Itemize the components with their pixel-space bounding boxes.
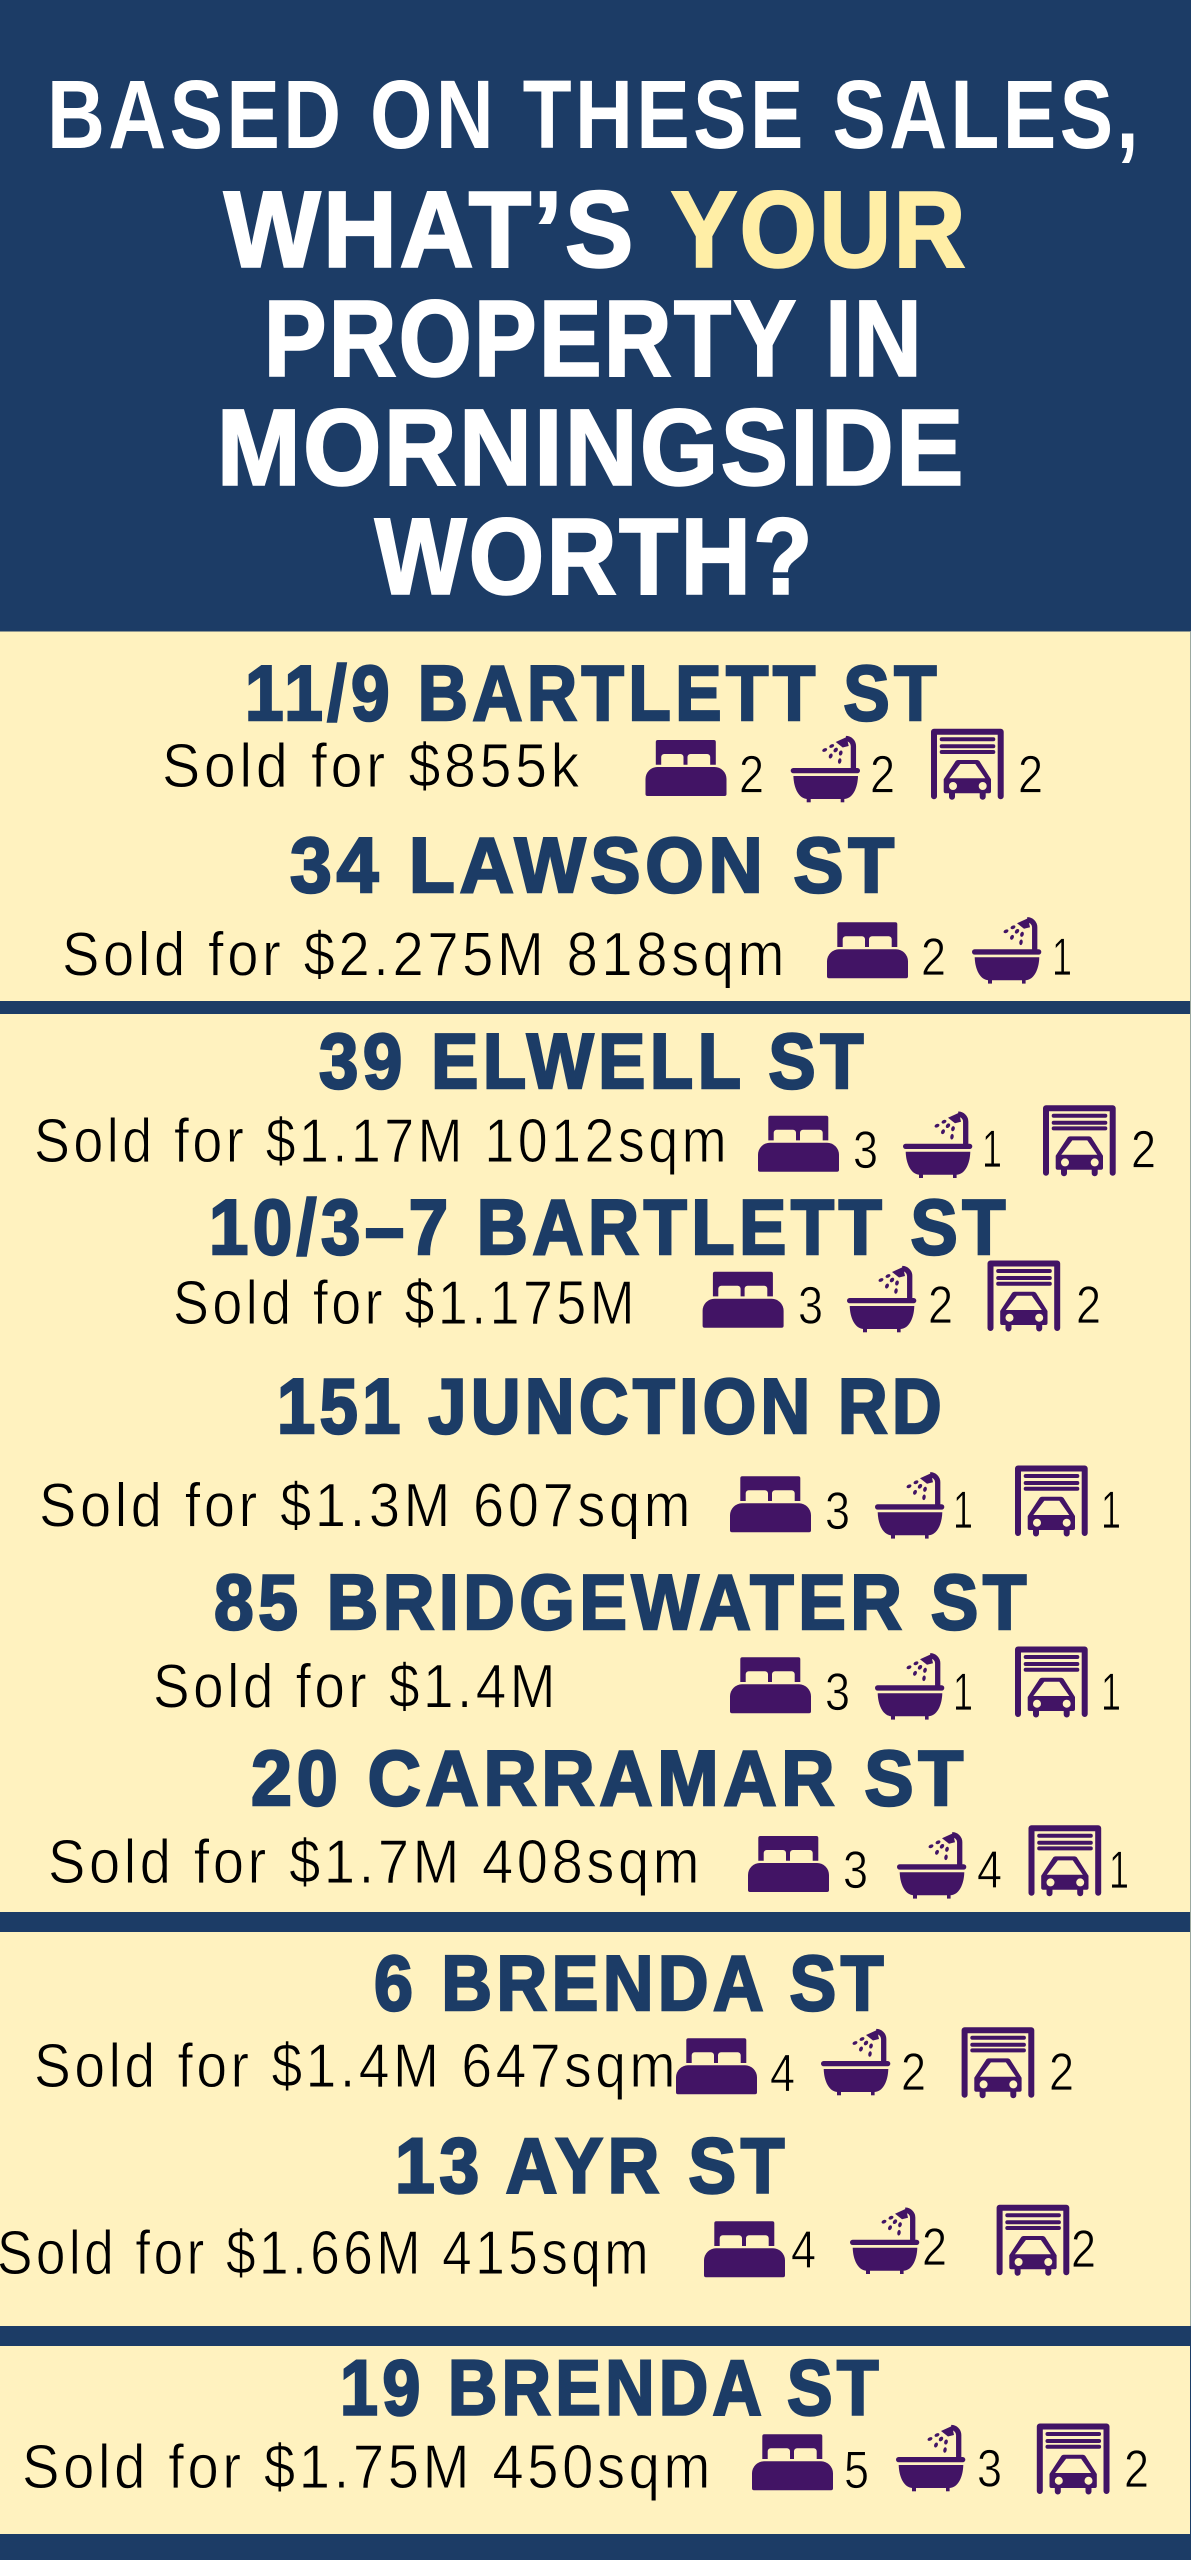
garage count: 2 <box>1131 1120 1156 1180</box>
panel: five bedroom sale <box>0 2344 1191 2534</box>
icon: bed <box>676 2038 757 2094</box>
address: 20 Carramar St: 20 CARRAMAR ST <box>251 1734 968 1822</box>
icon: bath <box>903 1113 972 1178</box>
section divider <box>0 1912 1191 1932</box>
panel: three bedroom sales <box>0 1014 1191 1912</box>
title word: what's: WHAT’S <box>224 168 636 290</box>
icon: bed <box>748 1836 829 1892</box>
icon: garage <box>965 2030 1031 2098</box>
bath count: 1 <box>982 1120 1002 1179</box>
section divider <box>0 2326 1191 2346</box>
title line: property in: PROPERTY IN <box>264 278 924 398</box>
panel: title header <box>0 0 1191 632</box>
sale details: 13 Ayr St: Sold for $1.66M 415sqm <box>0 2219 652 2288</box>
icon: bath <box>821 2030 890 2095</box>
address: 34 Lawson St: 34 LAWSON ST <box>290 821 899 909</box>
bath count: 2 <box>901 2043 926 2102</box>
icon: bed <box>730 1476 811 1532</box>
icon: garage <box>1032 1828 1098 1896</box>
footer bar <box>0 2534 1191 2560</box>
sale details: 85 Bridgewater St: Sold for $1.4M <box>153 1652 559 1722</box>
bath count: 2 <box>922 2218 947 2277</box>
icon: garage <box>1018 1468 1085 1536</box>
bed count: 3 <box>843 1841 868 1900</box>
icon: bath <box>897 1833 966 1899</box>
icon: bath <box>850 2209 919 2274</box>
bath count: 2 <box>870 746 895 804</box>
address: 11/9 Bartlett St: 11/9 BARTLETT ST <box>245 649 941 737</box>
icon: bed <box>704 2221 785 2277</box>
sale details: 34 Lawson St: Sold for $2.275M 818sqm <box>62 920 788 990</box>
sale details: 10/3-7 Bartlett St: Sold for $1.175M <box>173 1269 638 1338</box>
icon: garage <box>934 732 1001 800</box>
bath count: 1 <box>1052 928 1072 987</box>
bath count: 1 <box>953 1481 973 1540</box>
icon: garage <box>1046 1108 1113 1176</box>
address: 19 Brenda St: 19 BRENDA ST <box>340 2344 883 2432</box>
garage count: 1 <box>1101 1663 1121 1722</box>
bed count: 3 <box>853 1121 878 1180</box>
sale details: 151 Junction Rd: Sold for $1.3M 607sqm <box>39 1472 694 1540</box>
garage count: 2 <box>1071 2220 1096 2279</box>
address: 13 Ayr St: 13 AYR ST <box>395 2122 789 2210</box>
bed count: 3 <box>825 1482 850 1541</box>
address: 10/3-7 Bartlett St: 10/3–7 BARTLETT ST <box>209 1183 1010 1271</box>
bed count: 2 <box>739 746 764 804</box>
bath count: 2 <box>928 1276 953 1335</box>
garage count: 1 <box>1109 1841 1129 1900</box>
bed count: 2 <box>921 928 946 987</box>
icon: garage <box>1018 1650 1085 1718</box>
address: 151 Junction Rd: 151 JUNCTION RD <box>277 1362 946 1450</box>
sale details: 19 Brenda St: Sold for $1.75M 450sqm <box>22 2433 714 2502</box>
bath count: 3 <box>977 2440 1002 2498</box>
garage count: 2 <box>1049 2043 1074 2102</box>
bath count: 4 <box>977 1841 1002 1900</box>
section divider <box>0 1001 1191 1014</box>
garage count: 1 <box>1101 1481 1121 1540</box>
icon: garage <box>1000 2208 1066 2276</box>
title line: worth: WORTH? <box>375 496 815 616</box>
icon: garage <box>990 1264 1057 1332</box>
sale details: 39 Elwell St: Sold for $1.17M 1012sqm <box>34 1107 730 1176</box>
icon: bath <box>875 1654 944 1720</box>
icon: bath <box>847 1267 916 1332</box>
address: 6 Brenda St: 6 BRENDA ST <box>374 1939 888 2027</box>
icon: bath <box>875 1473 944 1539</box>
address: 85 Bridgewater St: 85 BRIDGEWATER ST <box>214 1558 1031 1646</box>
sale details: 20 Carramar St: Sold for $1.7M 408sqm <box>48 1828 703 1897</box>
icon: bath <box>791 737 860 802</box>
icon: garage <box>1040 2426 1106 2494</box>
icon: bed <box>758 1116 839 1172</box>
bed count: 3 <box>798 1276 823 1335</box>
bed count: 4 <box>791 2221 816 2280</box>
icon: bed <box>703 1272 784 1328</box>
bed count: 3 <box>825 1663 850 1722</box>
title line: morningside: MORNINGSIDE <box>217 386 966 508</box>
bed count: 4 <box>770 2044 795 2104</box>
bath count: 1 <box>953 1663 973 1722</box>
sale details: 6 Brenda St: Sold for $1.4M 647sqm <box>34 2032 679 2101</box>
panel: four bedroom sales <box>0 1932 1191 2326</box>
icon: bath <box>896 2426 965 2491</box>
address: 39 Elwell St: 39 ELWELL ST <box>319 1017 868 1105</box>
icon: bath <box>972 918 1041 984</box>
bed count: 5 <box>844 2441 869 2500</box>
icon: bed <box>752 2434 833 2490</box>
title word: your (highlight): YOUR <box>671 168 968 290</box>
panel: two bedroom sales <box>0 632 1191 1001</box>
icon: bed <box>646 740 726 796</box>
icon: bed <box>730 1657 811 1713</box>
sale details: 11/9 Bartlett St: Sold for $855k <box>162 732 583 801</box>
garage count: 2 <box>1018 746 1043 804</box>
garage count: 2 <box>1124 2440 1149 2499</box>
icon: bed <box>827 922 908 978</box>
garage count: 2 <box>1076 1276 1101 1335</box>
